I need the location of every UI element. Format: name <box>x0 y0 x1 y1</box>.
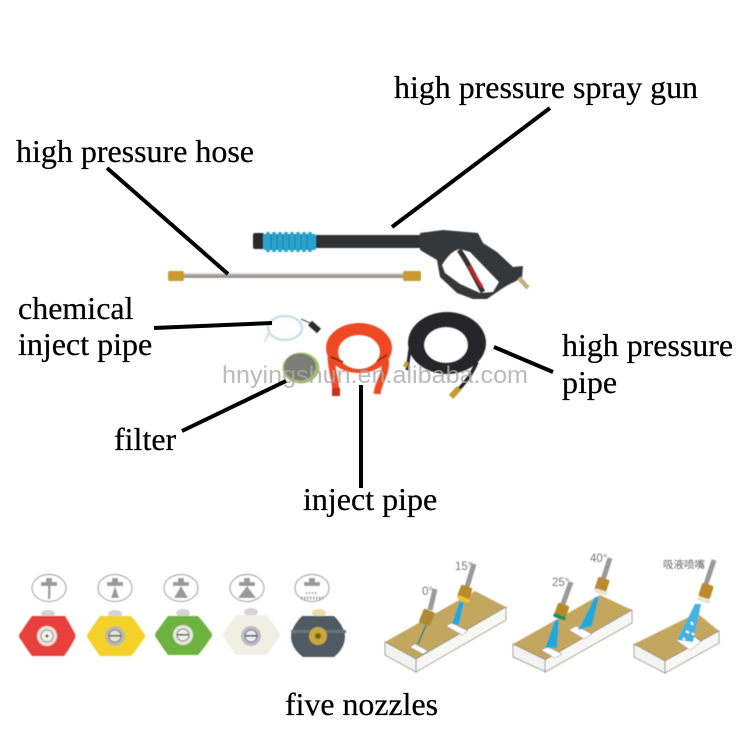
label: inject pipe: inject pipe <box>303 481 437 517</box>
arrow: chemical pipe leader <box>154 323 272 328</box>
label: five nozzles: five nozzles <box>285 686 438 722</box>
label: suction nozzle: 吸液喷嘴 <box>663 558 705 571</box>
arrow: high pressure pipe leader <box>494 347 553 372</box>
icon: filter <box>282 352 320 384</box>
icon: spray pattern 0 degrees <box>32 574 66 602</box>
icon: spray pattern 40 degrees <box>230 574 264 602</box>
icon: green nozzle <box>155 609 212 655</box>
icon: red inject hose <box>326 323 392 396</box>
icon: spray pattern 25 degrees <box>164 574 198 602</box>
diagram: soap nozzle board <box>634 558 719 673</box>
icon: chemical inject tube <box>265 316 319 342</box>
watermark: hnyingshun.en.alibaba.com <box>222 362 528 389</box>
label: high pressure spray gun: high pressure spray gun <box>394 69 698 105</box>
spray angle diagrams <box>385 553 719 673</box>
label: high pressure hose: high pressure hose <box>16 133 254 169</box>
label: high pressure pipe: high pressure <box>562 327 733 363</box>
icon: spray wand <box>168 271 421 281</box>
icon: black high pressure hose <box>405 312 486 397</box>
icon: yellow nozzle <box>87 610 145 656</box>
label: 40 degrees: 40° <box>590 553 607 565</box>
diagram: 25 and 40 degree board <box>513 553 632 672</box>
arrow: hose leader <box>107 168 228 274</box>
icon: spray gun <box>253 230 528 299</box>
icon: red nozzle <box>19 610 76 656</box>
diagram: 0 and 15 degree board <box>385 561 506 672</box>
label: 15 degrees: 15° <box>455 561 472 573</box>
label: high pressure pipe <box>562 327 733 400</box>
label: chemical inject pipe: chemical <box>18 290 134 326</box>
nozzle row <box>19 574 346 657</box>
arrow: spray gun leader <box>392 108 550 227</box>
icon: spray pattern 15 degrees <box>98 574 132 602</box>
label: chemical inject pipe <box>18 290 152 362</box>
label: 0 degrees: 0° <box>422 586 433 598</box>
label: high pressure pipe: pipe <box>562 364 617 400</box>
label: 25 degrees: 25° <box>552 577 569 589</box>
icon: dark soap nozzle <box>291 609 346 657</box>
icon: spray pattern soap <box>295 574 329 602</box>
arrow: filter leader <box>182 381 286 431</box>
icon: white nozzle <box>223 608 280 655</box>
label: filter: filter <box>114 421 177 457</box>
label: chemical inject pipe: inject pipe <box>18 326 152 362</box>
arrow: inject pipe leader <box>359 385 363 488</box>
